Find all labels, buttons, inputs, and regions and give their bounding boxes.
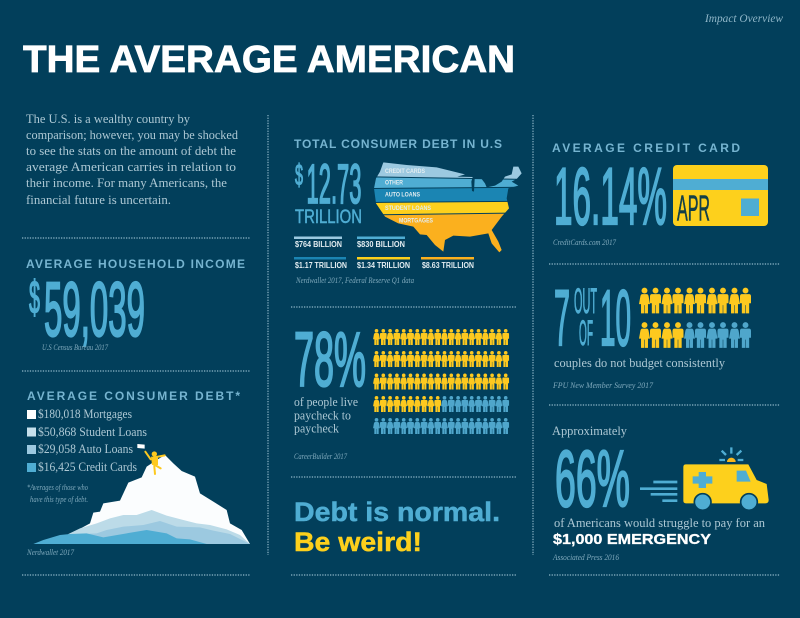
row 4: [373, 396, 509, 412]
panel: average household income: 59,039: [44, 267, 145, 353]
US map debt bands: [374, 162, 522, 252]
source: fpu: FPU New Member Survey 2017: [552, 380, 654, 390]
siren light: [719, 447, 743, 462]
map band labels: MORTGAGES: [399, 218, 433, 224]
map band labels: AUTO LOANS: [385, 192, 420, 198]
couples people icons: [639, 288, 751, 348]
paycheck description: paycheck: [294, 420, 339, 436]
callout: debt is normal: Be weird!: [294, 527, 422, 557]
source: federal reserve: Nerdwallet 2017, Federal Reserve Q1 data: [295, 275, 414, 285]
paycheck description: of people live: [294, 394, 358, 409]
paycheck description: [294, 394, 358, 436]
heading: consumer debt: AVERAGE CONSUMER DEBT*: [27, 389, 240, 403]
figure: $12.73 trillion: [295, 152, 362, 228]
source: careerbuilder: CareerBuilder 2017: [294, 451, 348, 461]
debt legend: $29,058 Auto Loans: [38, 441, 133, 456]
source: associated press: Associated Press 2016: [552, 552, 620, 562]
debt amounts legend: $1.17 TRILLION: [295, 261, 347, 270]
callout: debt is normal: Debt is normal.: [294, 497, 500, 527]
panel: emergency: [552, 423, 769, 562]
heading: household income: AVERAGE HOUSEHOLD INCOME: [26, 257, 245, 271]
figure: 7 out of 10: OF: [579, 314, 593, 353]
map band labels: OTHER: [385, 180, 404, 186]
intro paragraph: The U.S. is a wealthy country by: [26, 111, 190, 126]
intro paragraph: their income. For many Americans, the: [26, 175, 227, 190]
intro paragraph: average American carries in relation to: [26, 159, 236, 174]
map band labels: [385, 169, 433, 224]
panel: paycheck to paycheck: 78%: [294, 317, 366, 403]
intro paragraph: to see the stats on the amount of debt the: [26, 143, 236, 158]
mountain illustration: [33, 444, 250, 544]
speed lines: [640, 482, 677, 501]
debt amounts legend: $830 BILLION: [357, 240, 405, 249]
dotted column and section dividers: [22, 115, 780, 575]
debt legend: $16,425 Credit Cards: [38, 459, 137, 474]
debt amounts legend: $1.34 TRILLION: [357, 261, 410, 270]
panel: paycheck to paycheck: [294, 317, 509, 461]
map band labels: STUDENT LOANS: [385, 206, 431, 212]
debt amounts legend: $8.63 TRILLION: [422, 261, 474, 270]
intro paragraph: financial future is uncertain.: [26, 192, 171, 207]
panel: emergency: 66%: [555, 434, 630, 523]
wheels: [694, 494, 757, 510]
source: census: U.S Census Bureau 2017: [42, 342, 109, 352]
icon: credit card: [673, 165, 768, 228]
figure: $12.73 trillion: TRILLION: [295, 206, 362, 228]
debt legend: $180,018 Mortgages: [38, 406, 132, 421]
couples description: couples do not budget consistently: [554, 355, 725, 370]
source: creditcards: CreditCards.com 2017: [553, 237, 617, 247]
callout: debt is normal: [294, 497, 500, 557]
figure: $59,039: $: [29, 271, 40, 323]
row 5: [373, 418, 509, 434]
figure: 7 out of 10: 7: [554, 273, 570, 362]
debt amounts legend: $764 BILLION: [295, 240, 342, 249]
figure: 7 out of 10: [554, 273, 631, 362]
emergency description: of Americans would struggle to pay for an: [554, 515, 765, 530]
approximately label: Approximately: [552, 423, 627, 438]
footnote: have this type of debt.: [30, 494, 88, 504]
footnote: [27, 482, 88, 504]
cross: [693, 472, 712, 488]
icon: credit card: APR: [677, 188, 710, 228]
title: THE AVERAGE AMERICAN: [23, 39, 515, 81]
row 2: [373, 351, 509, 367]
figure: $59,039: [29, 267, 145, 353]
row 1: [373, 329, 509, 345]
heading: credit card: AVERAGE CREDIT CARD: [552, 141, 740, 155]
icon: ambulance: [640, 447, 769, 510]
intro paragraph: comparison; however, you may be shocked: [26, 127, 238, 142]
emergency description: [553, 515, 765, 548]
panel: total consumer debt: 12.73: [306, 152, 362, 215]
debt legend: [27, 406, 147, 474]
source: nerdwallet: Nerdwallet 2017: [26, 547, 75, 557]
van body: [683, 464, 769, 503]
intro paragraph: [26, 111, 238, 207]
people grid: [373, 329, 509, 434]
footnote: *Averages of those who: [27, 482, 88, 492]
debt amounts legend: [294, 236, 474, 270]
heading: total consumer debt: TOTAL CONSUMER DEBT IN U.S: [294, 137, 502, 151]
panel: 7 out of 10: [552, 273, 751, 390]
header label: Impact Overview: Impact Overview: [704, 11, 783, 25]
row 3: [373, 374, 509, 390]
emergency description: $1,000 EMERGENCY: [553, 532, 711, 548]
climber with flag: [137, 444, 165, 474]
debt legend: $50,868 Student Loans: [38, 424, 147, 439]
figure: 7 out of 10: OUT: [574, 282, 597, 321]
panel: average consumer debt: [26, 389, 250, 557]
window: [737, 471, 751, 482]
paycheck description: paycheck to: [294, 408, 351, 422]
figure: $12.73 trillion: $: [295, 159, 303, 192]
panel: 7 out of 10: 10: [600, 273, 631, 362]
panel: total consumer debt: [294, 137, 530, 285]
map band labels: CREDIT CARDS: [385, 169, 425, 175]
